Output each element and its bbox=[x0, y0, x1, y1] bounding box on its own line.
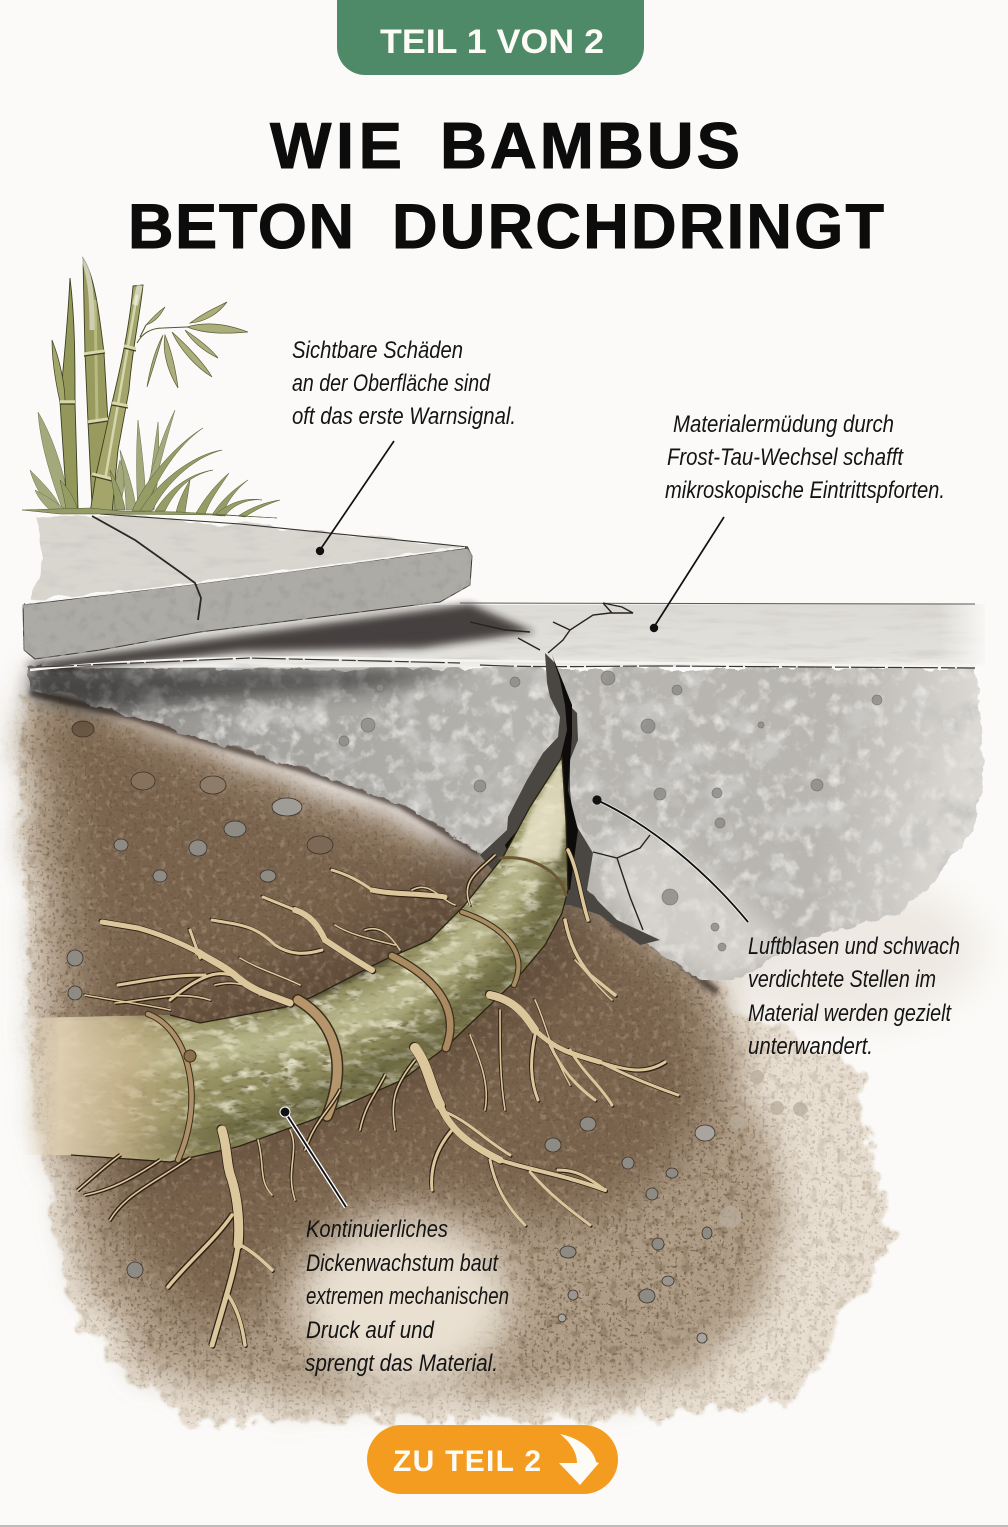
callout: thickness growth: Dickenwachstum baut bbox=[306, 1250, 499, 1277]
title bbox=[128, 109, 884, 262]
title: BAMBUS bbox=[440, 109, 740, 182]
rhizome bbox=[20, 757, 572, 1165]
concrete surface bbox=[25, 600, 990, 672]
crack in concrete bbox=[470, 603, 660, 945]
button: to part 2 bbox=[367, 1425, 618, 1494]
leader: growth bbox=[280, 1107, 346, 1207]
callout: air bubbles: Luftblasen und schwach bbox=[748, 933, 960, 960]
slab side bbox=[23, 548, 472, 659]
title: WIE bbox=[270, 109, 402, 182]
callout: visible damage: an der Oberfläche sind bbox=[292, 370, 491, 397]
badge: part 1 of 2 bbox=[337, 0, 644, 75]
pale patch behind text bbox=[300, 1220, 510, 1384]
callout: visible damage: Sichtbare Schäden bbox=[292, 337, 463, 364]
callout: thickness growth: Druck auf und bbox=[306, 1317, 435, 1344]
grass front bbox=[22, 428, 280, 518]
title: DURCHDRINGT bbox=[392, 192, 884, 262]
soil speckle bbox=[6, 694, 899, 1430]
callout: thickness growth: Kontinuierliches bbox=[306, 1216, 448, 1243]
soil cross-section bbox=[0, 674, 900, 1431]
callout: air bubbles: Material werden gezielt bbox=[748, 1000, 952, 1027]
front stem bbox=[90, 285, 143, 513]
callout: material fatigue: Frost-Tau-Wechsel schafft bbox=[667, 444, 904, 471]
leader: frost bbox=[650, 517, 724, 632]
callout: material fatigue: mikroskopische Eintrittspforten. bbox=[665, 477, 945, 504]
nodes bbox=[60, 346, 136, 479]
grass back bbox=[30, 410, 175, 512]
bamboo plant bbox=[22, 258, 280, 518]
slab top bbox=[30, 514, 465, 600]
wash beneath concrete and callout bbox=[680, 875, 980, 1025]
callout: visible damage bbox=[292, 337, 516, 430]
button: to part 2: ZU TEIL 2 bbox=[393, 1445, 541, 1478]
tall stem bbox=[83, 258, 108, 505]
soil pebbles bbox=[67, 721, 807, 1343]
callout: air bubbles: verdichtete Stellen im bbox=[748, 966, 936, 993]
thin stem bbox=[60, 278, 78, 508]
callout: thickness growth bbox=[305, 1216, 509, 1377]
callout: thickness growth: extremen mechanischen bbox=[306, 1283, 509, 1310]
leader: air bubbles bbox=[592, 795, 748, 922]
callout: visible damage: oft das erste Warnsignal. bbox=[292, 403, 516, 430]
callout: air bubbles: unterwandert. bbox=[748, 1033, 873, 1060]
gap around rhizome bbox=[480, 653, 660, 945]
title: BETON bbox=[128, 192, 354, 262]
callout: air bubbles bbox=[748, 933, 960, 1060]
leader: surface bbox=[316, 441, 394, 555]
air bubbles bbox=[339, 671, 882, 951]
concrete shading bbox=[30, 668, 470, 712]
badge: part 1 of 2: TEIL 1 VON 2 bbox=[380, 23, 604, 61]
leader lines bbox=[280, 441, 748, 1207]
bamboo leaves bbox=[146, 302, 248, 388]
growth rings bbox=[148, 858, 566, 1160]
callout: thickness growth: sprengt das Material. bbox=[305, 1350, 498, 1377]
callout: material fatigue: Materialermüdung durch bbox=[673, 411, 894, 438]
callout: material fatigue bbox=[665, 411, 945, 504]
hairline cracks bbox=[470, 603, 650, 930]
concrete block side bbox=[28, 668, 985, 990]
icon: curved arrow bbox=[559, 1434, 599, 1485]
bottom edge line bbox=[0, 1525, 1008, 1527]
roots bbox=[77, 849, 679, 1346]
raised concrete slab bbox=[23, 514, 472, 659]
dark soil band along concrete bbox=[30, 692, 717, 992]
